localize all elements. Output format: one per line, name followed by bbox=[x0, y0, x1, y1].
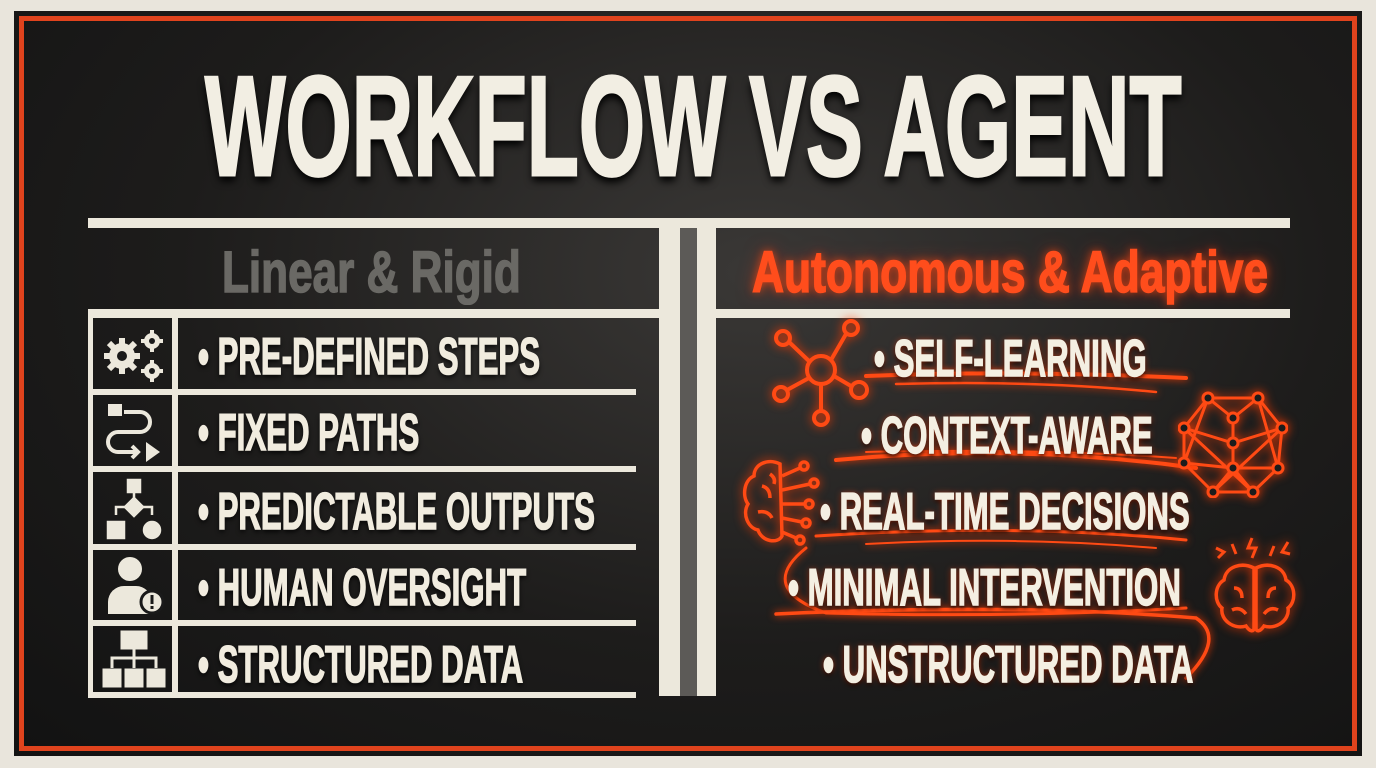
orange swooshes bbox=[770, 365, 1217, 684]
left heading: Linear & Rigid bbox=[222, 240, 521, 305]
icon: neural mesh bbox=[1170, 384, 1296, 506]
text: fixed paths: • FIXED PATHS bbox=[198, 404, 419, 462]
panel: agent list bbox=[735, 312, 1304, 694]
title: WORKFLOW VS AGENT bbox=[205, 47, 1182, 206]
text: self-learning: • SELF-LEARNING bbox=[874, 330, 1147, 388]
panel: workflow list bbox=[88, 318, 636, 698]
icon: human oversight bbox=[108, 557, 162, 614]
structure bars bbox=[88, 218, 1290, 228]
text: real-time decisions: • REAL-TIME DECISIONS bbox=[820, 483, 1190, 541]
icon: network hub bbox=[765, 312, 876, 434]
icon: flowchart bbox=[106, 478, 162, 540]
text: human oversight: • HUMAN OVERSIGHT bbox=[198, 559, 526, 617]
right heading: Autonomous & Adaptive bbox=[752, 240, 1268, 305]
text: unstructured data: • UNSTRUCTURED DATA bbox=[823, 636, 1193, 694]
divider lines under headings bbox=[88, 309, 659, 318]
text: predictable outputs: • PREDICTABLE OUTPUTS bbox=[198, 483, 595, 541]
icon: fixed path bbox=[106, 404, 160, 462]
icon: hierarchy bbox=[102, 630, 166, 688]
icon: gears bbox=[104, 330, 163, 382]
icon: brain circuit bbox=[735, 452, 826, 552]
text: structured data: • STRUCTURED DATA bbox=[198, 636, 523, 694]
text: context-aware: • CONTEXT-AWARE bbox=[861, 407, 1153, 465]
text: pre-defined steps: • PRE-DEFINED STEPS bbox=[198, 328, 540, 386]
text: minimal intervention: • MINIMAL INTERVENTION bbox=[788, 559, 1181, 617]
icon: brain with sparks bbox=[1207, 533, 1304, 640]
